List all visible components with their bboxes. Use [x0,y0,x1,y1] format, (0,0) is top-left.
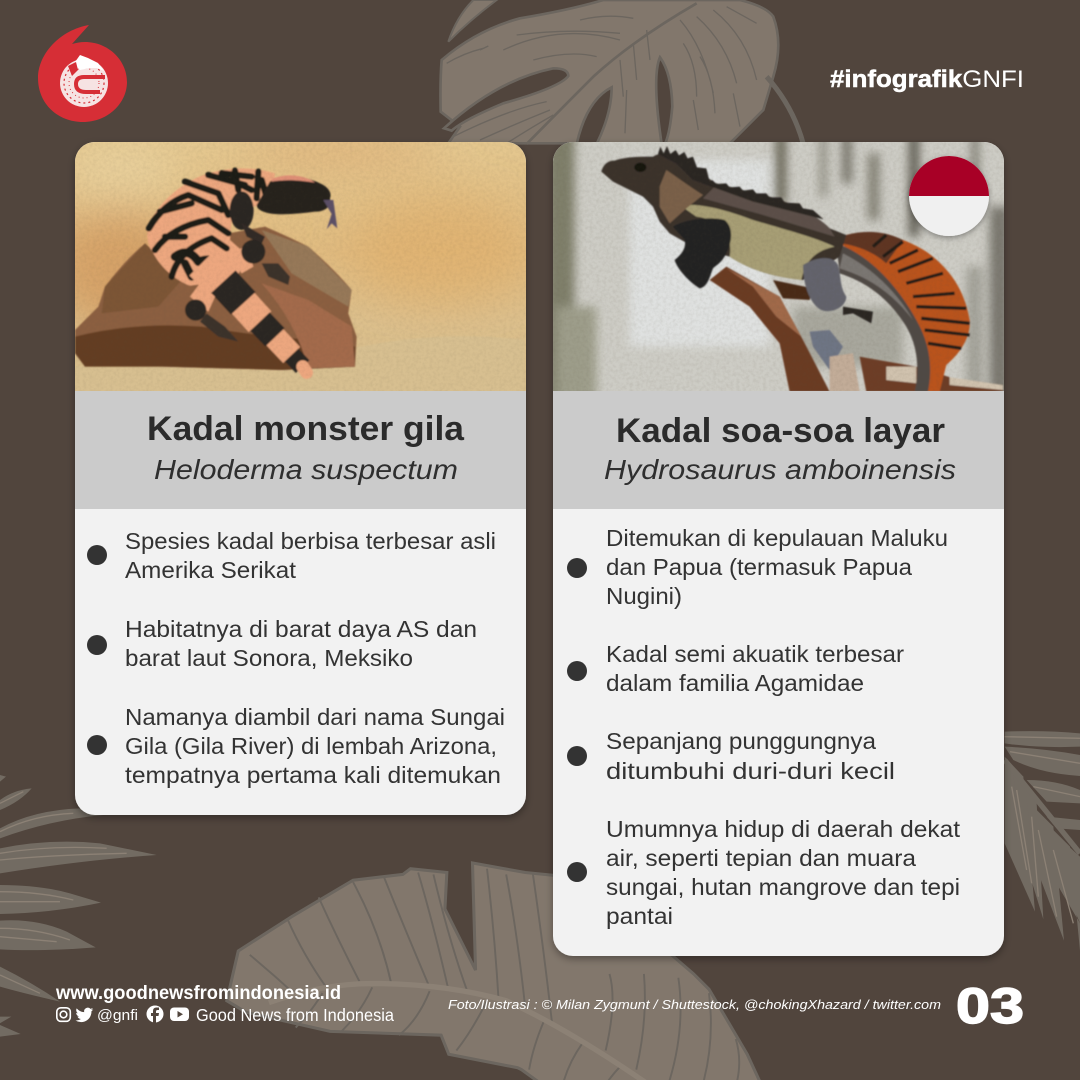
card body [75,142,526,815]
scientific name: Heloderma suspectum [154,454,458,485]
icon: twitter [76,1008,93,1022]
page number: 03 [956,978,1024,1034]
fact 2: barat laut Sonora, Meksiko [125,645,413,671]
fact 1: Amerika Serikat [125,557,297,583]
panel: left card, Kadal monster gila [50,132,530,815]
dorsal spikes [658,146,824,219]
tail and sail [840,233,970,392]
icon: facebook [146,1006,164,1023]
rock [75,227,357,370]
card body [553,142,1004,956]
fact 3 [567,728,895,784]
fact 4 [567,816,961,929]
icon: instagram [57,1008,70,1021]
fact 1 [87,528,496,583]
photo: sailfin lizard on a branch [553,142,1004,391]
scientific name: Hydrosaurus amboinensis [604,454,956,485]
flag of Indonesia [909,156,989,236]
fact 2: dalam familia Agamidae [606,670,864,696]
fact 2: Kadal semi akuatik terbesar [606,641,904,667]
hind leg [803,258,846,311]
front leg [673,218,731,288]
fact 3: tempatnya pertama kali ditemukan [125,762,501,788]
handle: @gnfi [97,1007,138,1024]
fact 3: ditumbuhi duri-duri kecil [606,758,895,784]
lizard body [147,168,275,286]
hashtag header: #infografik GNFI [830,66,1024,93]
background leaf: palm right [1005,731,1080,951]
panel: right card, Kadal soa-soa layar [546,127,1010,956]
photo grain [75,142,526,391]
fact 2 [87,616,477,671]
photo: gila monster on a rock [50,132,530,392]
background leaf: monstera top [440,0,803,144]
fact 3: Sepanjang punggungnya [606,728,876,754]
lizard head [257,177,331,214]
fact 2: Habitatnya di barat daya AS dan [125,616,477,642]
fact 4: pantai [606,903,673,929]
body [601,153,846,280]
branch [710,267,830,392]
fact 3 [87,704,505,788]
page name: Good News from Indonesia [196,1005,394,1025]
background leaf: palm left [0,775,157,1037]
icon: youtube [170,1008,189,1021]
fact 1: dan Papua (termasuk Papua [606,554,912,580]
title: Kadal soa-soa layar [616,412,945,450]
website: www.goodnewsfromindonesia.id [55,983,341,1004]
fact 1: Ditemukan di kepulauan Maluku [606,525,948,551]
fact 4: Umumnya hidup di daerah dekat [606,816,961,842]
lizard legs [230,191,254,230]
fact 4: air, seperti tepian dan muara [606,845,916,871]
fact 1 [567,525,948,609]
fact 4: sungai, hutan mangrove dan tepi [606,874,960,900]
photo credit: Foto/Ilustrasi : © Milan Zygmunt / Shuttestock, @chokingXhazard / twitter.com [448,997,941,1012]
title band [553,391,1004,509]
fact 1: Spesies kadal berbisa terbesar asli [125,528,496,554]
footer: website and social media [55,983,394,1025]
fact 3: Namanya diambil dari nama Sungai [125,704,505,730]
background leaf: banana bottom [227,863,770,1080]
fact 2 [567,641,904,696]
title: Kadal monster gila [147,410,465,448]
fact 1: Nugini) [606,583,682,609]
eye [634,163,646,172]
logo: GNFI red mark [38,25,127,122]
photo grain [553,142,1004,391]
fact 3: Gila (Gila River) di lembah Arizona, [125,733,497,759]
title band [75,391,526,509]
lizard tail [203,262,307,373]
